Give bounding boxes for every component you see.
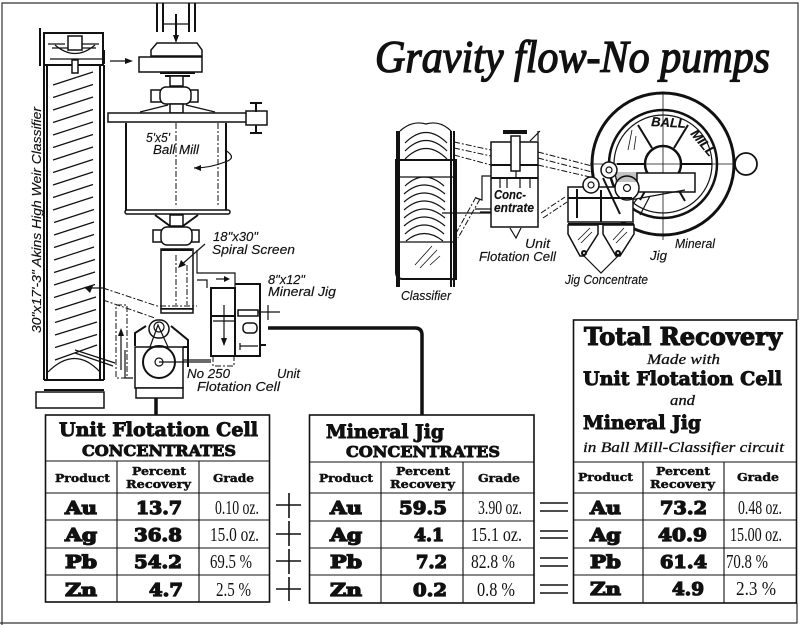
jig plan with pulleys and hoppers [568, 162, 695, 273]
row: Ag [329, 524, 522, 546]
label: flotation cell: Flotation Cell [479, 249, 557, 264]
script: circuit note: in Ball Mill-Classifier circuit [583, 440, 785, 456]
row: Zn: 4.9 [672, 579, 704, 600]
label: ball mill name: Ball Mill [153, 142, 200, 157]
row: Ag: Ag [64, 525, 97, 546]
column header: percent: Percent [396, 465, 451, 478]
row: Ag [64, 524, 259, 546]
row: Pb: 61.4 [660, 552, 707, 573]
label: classifier: 30"x17'-3" Akins High Weir Classifier [29, 106, 44, 333]
heading: mineral jig: Mineral Jig [583, 412, 701, 434]
row: Zn: 0.8 % [477, 579, 515, 601]
label: no 250: No 250 [187, 366, 231, 381]
heading: unit flotation cell: Unit Flotation Cell [583, 368, 782, 390]
label: jig: Jig [649, 248, 668, 263]
row: Au: 0.10 oz. [215, 497, 259, 519]
row: Pb [590, 551, 768, 573]
row: Pb [65, 551, 252, 573]
label: mineral jig: Mineral Jig [268, 284, 337, 299]
column header: grade: Grade [478, 472, 520, 485]
row: Ag: Ag [589, 525, 621, 546]
column header: percent: Percent [656, 465, 711, 478]
label: unit: Unit [525, 236, 551, 251]
row: Pb: Pb [590, 552, 621, 573]
label: flotation cell: Flotation Cell [197, 379, 281, 394]
row: Au: 0.48 oz. [738, 497, 782, 519]
table: mineral jig concentrates [309, 415, 534, 603]
row: Pb: Pb [330, 552, 362, 573]
ball mill plan [590, 92, 757, 240]
classifier elevation [36, 28, 115, 408]
row: Au [589, 497, 782, 519]
classifier plan [396, 123, 456, 287]
table subheading: CONCENTRATES [82, 442, 236, 460]
label: mineral: Mineral [675, 236, 716, 251]
table subheading: CONCENTRATES [346, 443, 500, 461]
column header: recovery: Recovery [390, 478, 456, 491]
diagram: side elevation of mill circuit [29, 3, 422, 415]
row: Pb: 7.2 [416, 552, 447, 573]
flotation cell plan [475, 130, 540, 238]
row: Pb: 54.2 [134, 552, 182, 573]
ball mill with feed and spout [108, 3, 267, 245]
row: Zn: 0.2 [413, 580, 447, 601]
column header: grade: Grade [213, 472, 254, 485]
row: Zn [590, 578, 776, 600]
row: Pb: Pb [65, 552, 97, 573]
row: Au [64, 497, 259, 519]
ball mill plan: BALL [651, 114, 686, 131]
equals signs [540, 503, 568, 593]
row: Zn: 2.3 % [736, 578, 776, 600]
table: unit flotation cell concentrates [45, 415, 270, 602]
row: Zn: Zn [65, 580, 97, 601]
flotation cell elevation [135, 320, 211, 398]
row: Au: 3.90 oz. [478, 497, 522, 519]
label: jig concentrate: Jig Concentrate [564, 272, 648, 287]
column header: grade: Grade [737, 471, 779, 484]
row: Zn: Zn [330, 580, 362, 601]
column header: recovery: Recovery [650, 478, 716, 491]
table heading: Mineral Jig [326, 421, 444, 443]
flow lines between machines [442, 142, 592, 238]
row: Ag: 15.1 oz. [471, 524, 522, 546]
pipe from jig to table [268, 328, 422, 415]
spiral screen [161, 244, 205, 313]
mineral jig elevation [197, 250, 280, 366]
row: Zn: Zn [590, 579, 621, 600]
row: Pb [330, 551, 515, 573]
label: ball mill: 5'x5' [146, 130, 170, 145]
label: unit: Unit [277, 366, 301, 381]
row: Zn: 2.5 % [216, 579, 251, 601]
row: Au [329, 497, 522, 519]
row: Ag: 15.0 oz. [210, 524, 259, 546]
pipe from flotation cell to table [154, 398, 158, 415]
script: and: and [670, 393, 696, 409]
row: Ag: 36.8 [134, 525, 182, 546]
table heading: Total Recovery [584, 322, 783, 351]
row: Au: 59.5 [399, 498, 447, 519]
column header: product: Product [578, 471, 634, 484]
column header: recovery: Recovery [126, 478, 192, 491]
plus signs [276, 493, 301, 601]
label: spiral screen: Spiral Screen [212, 242, 295, 257]
row: Pb: 82.8 % [471, 551, 515, 573]
row: Zn: 4.7 [149, 580, 183, 601]
row: Ag [589, 524, 782, 546]
row: Pb: 70.8 % [726, 551, 768, 573]
label: concentrate second line: entrate [494, 200, 534, 215]
table: total recovery [573, 320, 796, 603]
diagram: schematic plan view [396, 92, 757, 303]
row: Pb: 69.5 % [210, 551, 252, 573]
launders and return pipe [84, 286, 197, 378]
row: Au: 13.7 [136, 498, 182, 519]
row: Au: Au [589, 498, 621, 519]
title: Gravity flow-No pumps [375, 32, 770, 82]
column header: percent: Percent [132, 465, 187, 478]
label: screen size: 18"x30" [213, 229, 259, 244]
row: Au: Au [64, 498, 97, 519]
label: jig size: 8"x12" [268, 272, 306, 287]
row: Au: Au [329, 498, 362, 519]
script: made with: Made with [646, 352, 720, 368]
label: concentrate: Conc- [494, 187, 526, 202]
row: Zn [330, 579, 515, 601]
row: Zn [65, 579, 251, 601]
label: classifier: Classifier [401, 288, 452, 303]
row: Ag: 40.9 [658, 525, 707, 546]
table heading: Unit Flotation Cell [59, 419, 258, 441]
row: Ag: 4.1 [414, 525, 444, 546]
column header: product: Product [319, 472, 374, 485]
column header: product: Product [55, 472, 111, 485]
row: Ag: Ag [329, 525, 362, 546]
arrows between machines [110, 14, 179, 64]
row: Au: 73.2 [660, 498, 707, 519]
ball mill plan: MILL [688, 126, 719, 159]
